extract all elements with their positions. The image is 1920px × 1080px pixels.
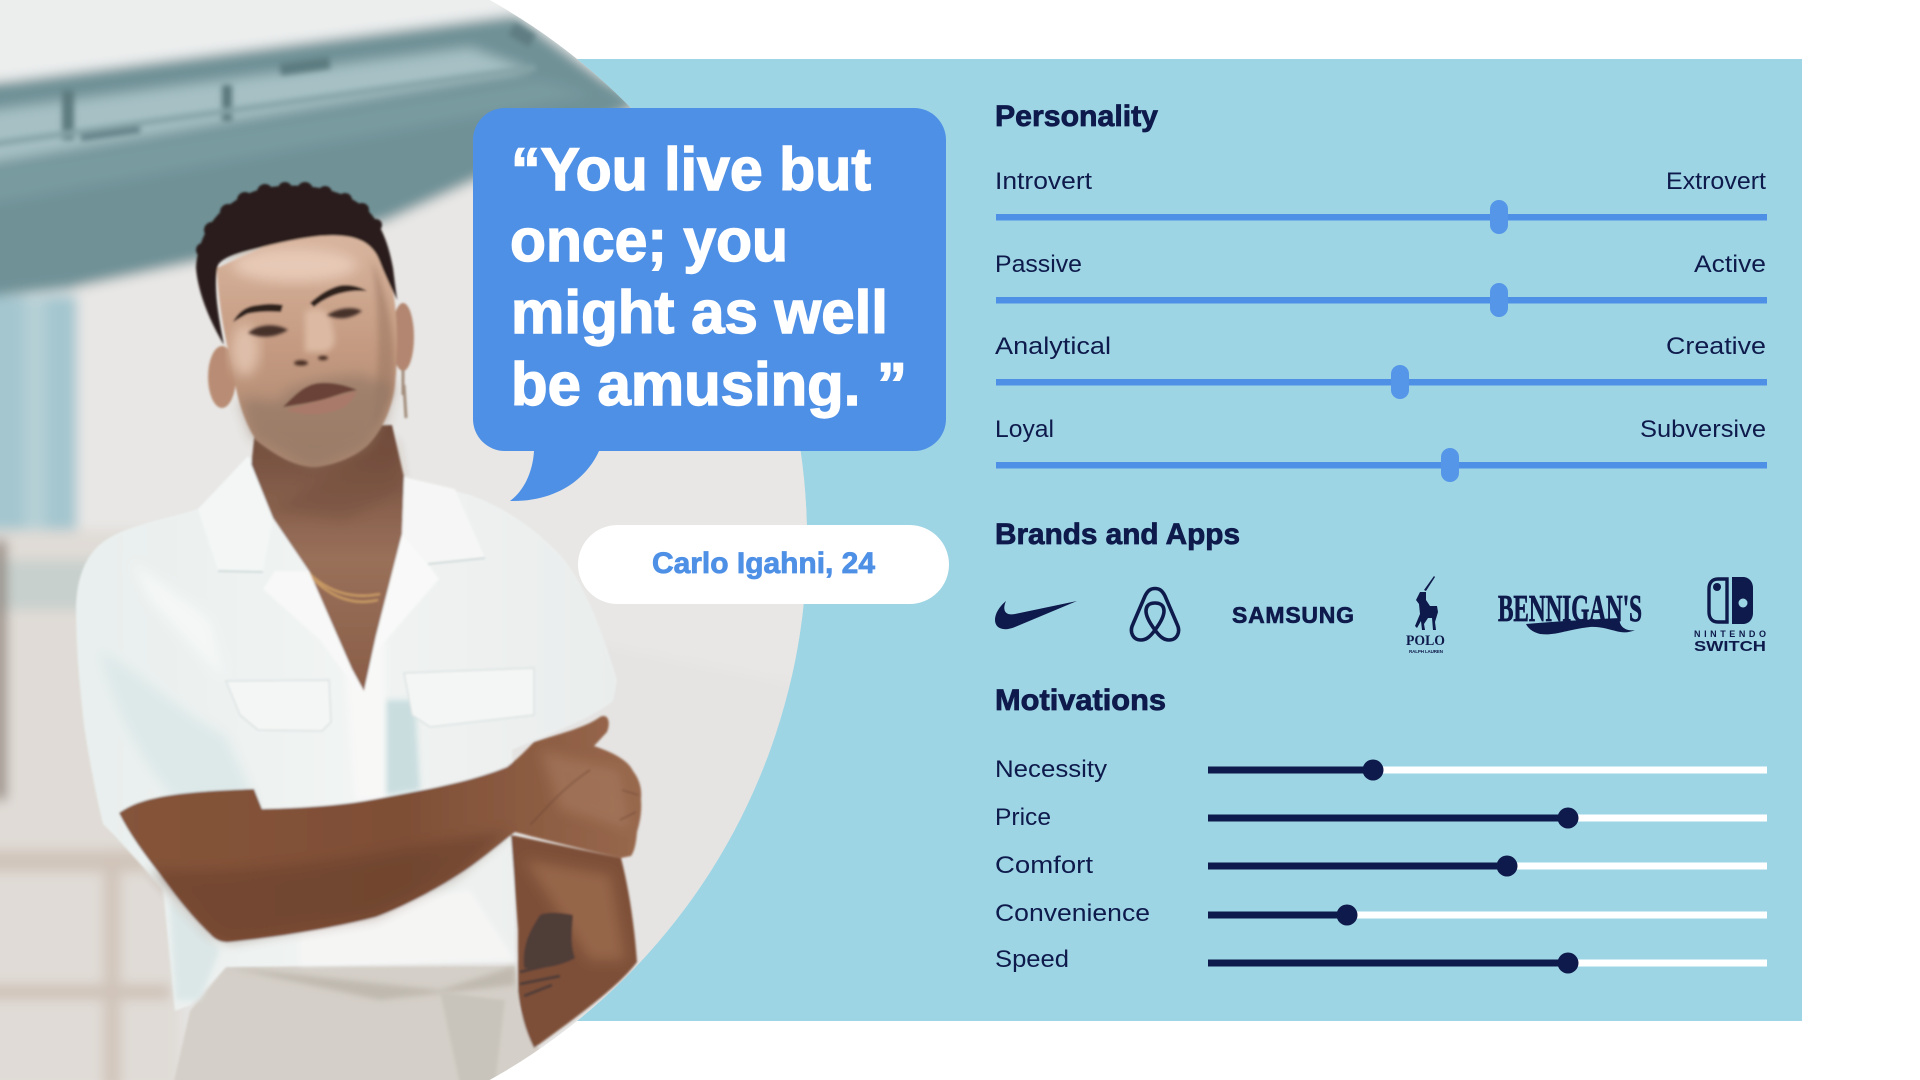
name pill: Carlo Igahni, 24	[652, 547, 875, 580]
bar: Comfort: Comfort	[995, 852, 1093, 879]
slider: Passive to Active: Passive	[995, 251, 1082, 278]
logo: Airbnb	[1131, 588, 1179, 640]
ears	[208, 303, 414, 418]
slider: Passive to Active	[995, 251, 1767, 317]
photo: trousers	[172, 966, 540, 1080]
slider: Analytical to Creative: Analytical	[995, 333, 1111, 360]
logo: Nintendo Switch	[1694, 577, 1766, 655]
bar: Speed: Speed	[995, 946, 1069, 973]
photo: shirt pockets	[226, 672, 420, 732]
logo: Nintendo Switch: SWITCH	[1694, 638, 1766, 655]
slider: Passive to Active: Active	[1694, 251, 1766, 278]
quote text: once; you	[510, 207, 788, 274]
logo: Polo Ralph Lauren: RALPH LAUREN	[1409, 649, 1443, 654]
bar: Price: Price	[995, 804, 1051, 831]
photo: man in white shirt clipped to circle	[0, 0, 880, 1080]
logo: Nintendo Switch: NINTENDO	[1694, 629, 1766, 639]
nose highlight	[305, 309, 334, 352]
bar: Convenience: Convenience	[995, 900, 1150, 927]
photo: shirt	[76, 456, 617, 1011]
mouth	[283, 383, 357, 407]
nostrils	[294, 356, 328, 366]
quote text	[510, 136, 907, 418]
photo: man figure	[76, 182, 641, 1080]
panel: blue background	[500, 59, 1802, 1021]
quote speech bubble	[473, 108, 946, 501]
bar: Necessity: Necessity	[995, 756, 1107, 783]
photo: head	[196, 182, 414, 467]
slider: Analytical to Creative: Creative	[1666, 333, 1766, 360]
quote text: be amusing. ”	[511, 351, 907, 418]
eyes	[248, 308, 362, 337]
slider: Loyal to Subversive: Loyal	[995, 416, 1054, 443]
bar: Speed	[995, 946, 1767, 974]
eyebrows	[233, 285, 367, 322]
photo: neck and chest	[250, 425, 404, 691]
slider: Introvert to Extrovert: Introvert	[995, 168, 1092, 195]
logo: Nike swoosh	[995, 601, 1077, 629]
photo: gold necklace	[308, 572, 380, 602]
bar: Comfort	[995, 852, 1767, 879]
bar: Necessity	[995, 756, 1767, 783]
photo background: blurred building	[0, 0, 880, 1080]
logo: Bennigan's	[1498, 588, 1642, 634]
forehead highlight	[233, 248, 357, 282]
photo: lower arm with tattoo	[511, 835, 637, 1048]
bar: Convenience	[995, 900, 1767, 927]
face	[217, 230, 397, 467]
cheek highlight	[231, 324, 259, 376]
stubble	[240, 375, 393, 467]
slider: Loyal to Subversive	[995, 416, 1767, 482]
quote text: “You live but	[511, 136, 871, 203]
logo: Samsung: SAMSUNG	[1232, 602, 1354, 628]
heading: Personality: Personality	[995, 100, 1158, 133]
photo: collar	[202, 464, 485, 640]
slider: Analytical to Creative	[995, 333, 1767, 399]
bar: Price	[995, 804, 1767, 831]
slider: Loyal to Subversive: Subversive	[1640, 416, 1766, 443]
heading: Motivations: Motivations	[995, 684, 1166, 717]
logo: Polo Ralph Lauren	[1406, 576, 1445, 654]
bubble shape with tail	[473, 108, 946, 501]
right side shade	[372, 268, 398, 399]
name pill	[578, 525, 949, 604]
photo: forearm and hand	[119, 716, 641, 942]
logo: Polo Ralph Lauren: POLO	[1406, 633, 1445, 649]
hair	[196, 182, 397, 345]
slider: Introvert to Extrovert: Extrovert	[1666, 168, 1766, 195]
quote text: might as well	[511, 279, 888, 346]
heading: Brands and Apps: Brands and Apps	[995, 518, 1240, 551]
slider: Introvert to Extrovert	[995, 168, 1767, 234]
logo: Bennigan's: BENNIGAN'S	[1498, 588, 1642, 630]
